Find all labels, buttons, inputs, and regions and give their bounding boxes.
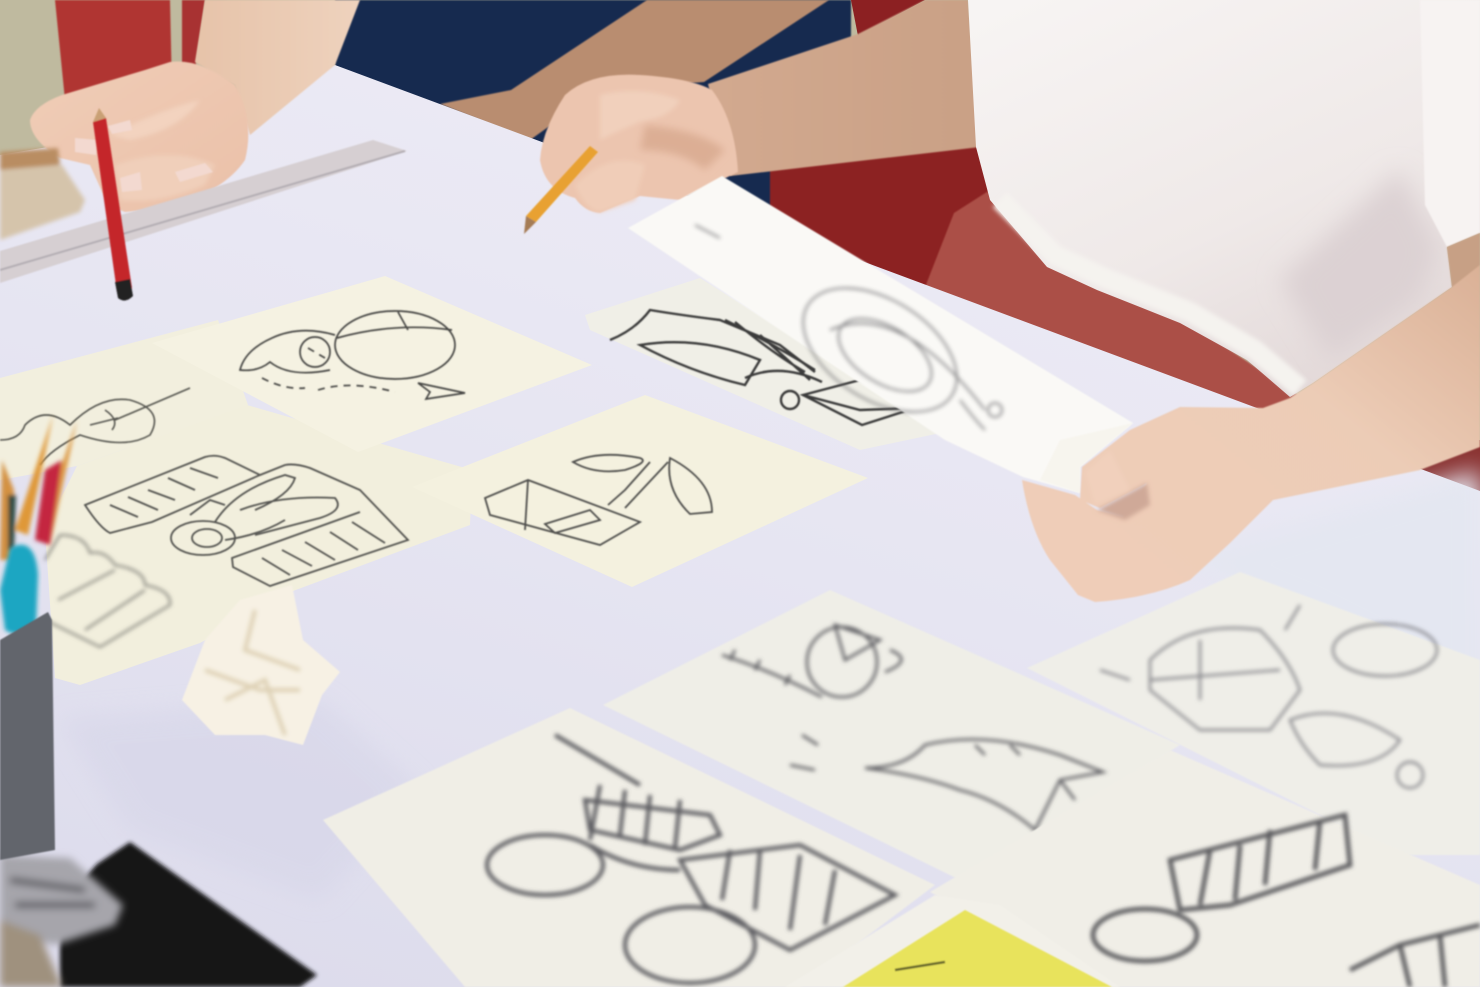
paper: bottom left car sketch [323,708,935,987]
sketch: violin [0,388,190,465]
chair right behind table [770,140,995,300]
orange pencil [524,146,598,234]
paper: bottom bear sketch [603,590,1180,880]
paper: right bottom sketch [1027,572,1480,855]
paper: rabbit sketch [45,405,472,685]
right forearm and hand [1022,233,1480,602]
sketch: octopus and envelope [610,310,915,425]
pencils in holder [0,415,77,560]
sketch: bear and globe [722,625,1103,830]
sketch: lower right car [1093,815,1480,987]
red pencil [93,108,133,301]
sketch: plant in box [485,455,712,545]
held sheet fold [1040,423,1133,493]
left arm [195,0,360,135]
desk clutter [0,855,123,987]
navy shirt [335,0,851,215]
red chair left [55,0,205,100]
paper: plant sketch [412,395,868,587]
blue pen caps [0,545,38,634]
pen holder [0,612,55,860]
skirt [922,190,1305,425]
skirt right of forearm [1400,440,1480,494]
sketch: scalloped loaf [45,535,170,647]
crumpled paper [182,585,340,745]
table light area right [1180,470,1480,700]
paper: left violin sketch [0,320,248,480]
sleeve [1420,0,1480,247]
sketch: faint robot [1100,605,1437,788]
left hand [30,61,248,212]
red corner behind arm [851,0,925,36]
sponge [0,148,85,240]
sketch: rabbit with shelves [85,456,408,586]
paper: ball sketch [152,276,592,452]
table soft shadow patch [60,700,420,900]
blouse hem [1000,200,1300,388]
far forearm [440,0,829,140]
sketch: ball and arrow [240,311,465,399]
white blouse [968,0,1480,397]
yellow sticky note [843,910,1112,987]
sketch: blurred car [487,735,895,983]
black tablet [60,842,317,987]
paper: lower right car sketch [930,750,1480,987]
ruler [0,140,407,283]
paper: octopus sketch [585,278,945,450]
blouse shadow [1280,170,1440,360]
paper: under yellow note [785,895,1120,987]
middle hand [540,75,738,213]
middle arm [708,0,980,176]
paper: held sheet [628,176,1133,493]
sketch: faint swirl on held sheet [695,225,1002,437]
